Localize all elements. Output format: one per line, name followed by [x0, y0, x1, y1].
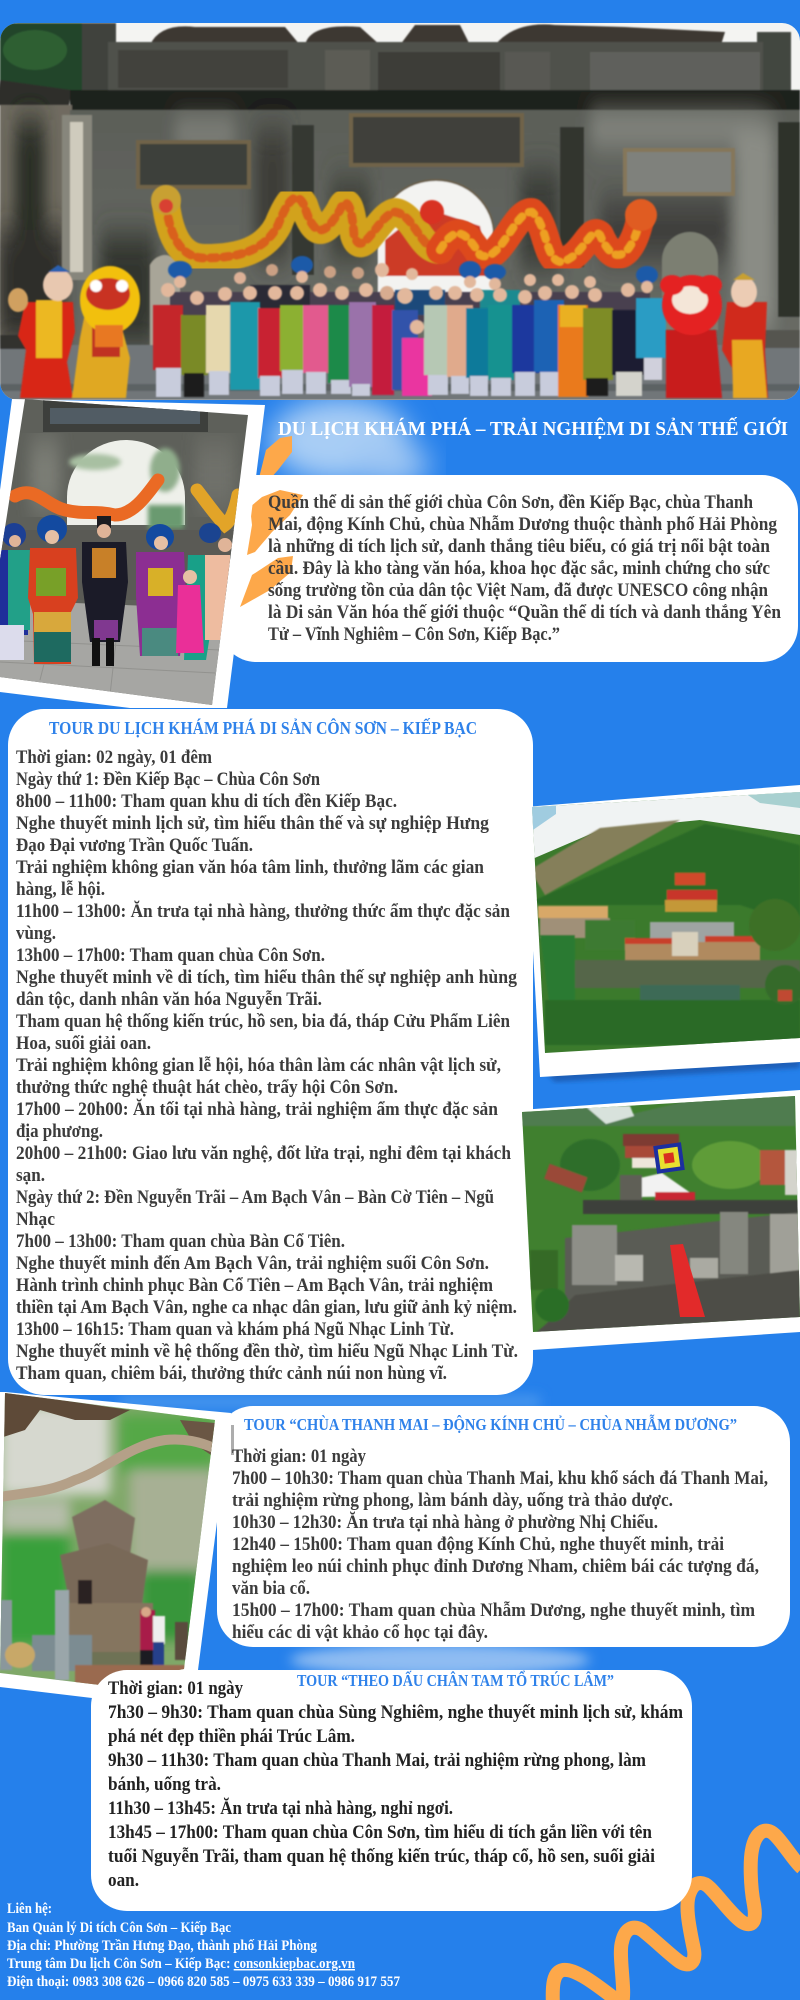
intro text: cầu. Đây là kho tàng văn hóa, khoa học đặc sắc, minh chứng cho sức — [268, 559, 770, 579]
tour 1 itinerary: Nghe thuyết minh về di tích, tìm hiểu thân thế sự nghiệp anh hùng — [16, 968, 518, 988]
intro text — [268, 493, 782, 645]
intro text: Tử – Vĩnh Nghiêm – Côn Sơn, Kiếp Bạc.” — [268, 625, 560, 645]
tour 1 itinerary: 13h00 – 17h00: Tham quan chùa Côn Sơn. — [16, 946, 325, 966]
hero dragon — [166, 198, 640, 262]
tour 2 itinerary: 15h00 – 17h00: Tham quan chùa Nhẫm Dương, nghe thuyết minh, tìm — [232, 1601, 756, 1621]
hero group of people back row — [168, 256, 658, 322]
tour 1 itinerary: sạn. — [16, 1166, 45, 1186]
tour 1 itinerary: Trải nghiệm không gian văn hóa tâm linh, thưởng lãm các gian — [16, 858, 485, 878]
contact information: Liên hệ: — [7, 1901, 52, 1917]
tour 1 itinerary: 20h00 – 21h00: Giao lưu văn nghệ, đốt lửa trại, nghỉ đêm tại khách — [16, 1144, 512, 1164]
tour 3 itinerary: 7h30 – 9h30: Tham quan chùa Sùng Nghiêm, nghe thuyết minh lịch sử, khám — [108, 1702, 683, 1723]
tour 1 itinerary: 8h00 – 11h00: Tham quan khu di tích đền Kiếp Bạc. — [16, 792, 397, 812]
tour 1 itinerary: 11h00 – 13h00: Ăn trưa tại nhà hàng, thưởng thức ẩm thực đặc sản — [16, 900, 511, 922]
contact information: Trung tâm Du lịch Côn Sơn – Kiếp Bạc: consonkiepbac.org.vn — [7, 1956, 355, 1972]
tour 3 itinerary: 9h30 – 11h30: Tham quan chùa Thanh Mai, trải nghiệm rừng phong, làm — [108, 1750, 646, 1771]
intro panel — [220, 436, 798, 662]
tour 1 itinerary: vùng. — [16, 924, 56, 944]
tour 1 itinerary: 13h00 – 16h15: Tham quan và khám phá Ngũ Nhạc Linh Từ. — [16, 1320, 454, 1340]
tour 1 itinerary: thưởng thức nghệ thuật hát chèo, trẩy hội Côn Sơn. — [16, 1078, 398, 1098]
tour 2 itinerary: văn bia cổ. — [232, 1579, 310, 1599]
tour 1 itinerary: Hành trình chinh phục Bàn Cổ Tiên – Am Bạch Vân, trải nghiệm — [16, 1276, 494, 1296]
tour 1 itinerary: Tham quan, chiêm bái, thưởng thức cảnh núi non hùng vĩ. — [16, 1364, 447, 1384]
tour 1 itinerary — [16, 748, 518, 1384]
tour 3 itinerary: oan. — [108, 1870, 139, 1891]
tour 2 itinerary: Thời gian: 01 ngày — [232, 1447, 367, 1467]
tour 3 itinerary: Thời gian: 01 ngày — [108, 1678, 243, 1699]
right photo: aerial view of gate with red carpet — [520, 1090, 800, 1350]
hero group of people front row — [153, 283, 666, 397]
tour 1 itinerary: Nghe thuyết minh đến Am Bạch Vân, trải nghiệm suối Côn Sơn. — [16, 1254, 489, 1274]
contact information: Địa chỉ: Phường Trần Hưng Đạo, thành phố Hải Phòng — [7, 1938, 318, 1954]
contact information: Ban Quản lý Di tích Côn Sơn – Kiếp Bạc — [7, 1920, 231, 1936]
hero photo: gate with dragon and group in ao dai — [0, 23, 800, 400]
tour 3 panel — [91, 1670, 692, 1911]
intro text: Quần thể di sản thế giới chùa Côn Sơn, đền Kiếp Bạc, chùa Thanh — [268, 493, 754, 513]
tour 1 itinerary: Nghe thuyết minh lịch sử, tìm hiểu thân thế và sự nghiệp Hưng — [16, 814, 490, 834]
intro text: là những di tích lịch sử, danh thắng tiêu biểu, có giá trị nổi bật toàn — [268, 537, 771, 557]
tour 1 itinerary: Trải nghiệm không gian lễ hội, hóa thân làm các nhân vật lịch sử, — [16, 1056, 501, 1076]
tour 1 itinerary: Ngày thứ 1: Đền Kiếp Bạc – Chùa Côn Sơn — [16, 770, 321, 790]
tour 2 itinerary: 10h30 – 12h30: Ăn trưa tại nhà hàng ở phường Nhị Chiểu. — [232, 1511, 658, 1533]
tour 1 itinerary: Thời gian: 02 ngày, 01 đêm — [16, 748, 213, 768]
tour 1 itinerary: địa phương. — [16, 1122, 103, 1142]
tour 1 itinerary: dân tộc, danh nhân văn hóa Nguyễn Trãi. — [16, 990, 322, 1010]
tour 2 itinerary: 12h40 – 15h00: Tham quan động Kính Chủ, nghe thuyết minh, trải — [232, 1535, 724, 1555]
intro text: Mai, động Kính Chủ, chùa Nhẫm Dương thuộc thành phố Hải Phòng — [268, 515, 778, 535]
right photo: aerial view of temple on mountain — [525, 785, 800, 1077]
tour 1 itinerary: Tham quan hệ thống kiến trúc, hồ sen, bia đá, tháp Cửu Phẩm Liên — [16, 1012, 511, 1032]
tilted photo: stone stupa among trees — [0, 1390, 231, 1700]
tilted photo: procession under gate arch — [0, 395, 265, 715]
tour 1 itinerary: Nghe thuyết minh về hệ thống đền thờ, tìm hiểu Ngũ Nhạc Linh Từ. — [16, 1342, 518, 1362]
hero wall — [0, 23, 800, 400]
tour 2 itinerary: 7h00 – 10h30: Tham quan chùa Thanh Mai, khu khổ sách đá Thanh Mai, — [232, 1469, 768, 1489]
tour 3 itinerary: 13h45 – 17h00: Tham quan chùa Côn Sơn, tìm hiểu di tích gắn liền với tên — [108, 1822, 652, 1843]
tour 3 itinerary: 11h30 – 13h45: Ăn trưa tại nhà hàng, nghỉ ngơi. — [108, 1797, 453, 1819]
hero dragon heads — [151, 185, 657, 231]
tour 2 itinerary: nghiệm leo núi chinh phục đỉnh Dương Nham, chiêm bái các tượng đá, — [232, 1557, 759, 1577]
tour 2 panel — [217, 1406, 790, 1647]
orange squiggle decoration — [553, 1831, 800, 2000]
orange brush stroke behind panel edge — [258, 436, 292, 488]
tour 1 itinerary: thiền tại Am Bạch Vân, nghe ca nhạc dân gian, lưu giữ ảnh kỷ niệm. — [16, 1298, 517, 1318]
cloud strip behind tour panels — [120, 1396, 590, 1676]
photo people — [0, 515, 232, 666]
contact information — [7, 1901, 400, 1990]
right photo frame shadow — [545, 1058, 800, 1082]
tour 1 panel — [8, 709, 533, 1395]
tour 2 itinerary — [232, 1447, 768, 1643]
tour 1 itinerary: Ngày thứ 2: Đền Nguyễn Trãi – Am Bạch Vân – Bàn Cờ Tiên – Ngũ — [16, 1188, 494, 1208]
tour 3 itinerary: phá nét đẹp thiền phái Trúc Lâm. — [108, 1726, 355, 1747]
contact information: Điện thoại: 0983 308 626 – 0966 820 585 – 0975 633 339 – 0986 917 557 — [7, 1974, 400, 1990]
tour 3 itinerary — [108, 1678, 683, 1891]
cloud texture behind heading — [270, 398, 430, 487]
tour 3 itinerary: bánh, uống trà. — [108, 1774, 221, 1795]
tour 1 itinerary: Hoa, suối giải oan. — [16, 1034, 151, 1054]
photo dragon — [15, 480, 238, 525]
tour 1 itinerary: Đạo Đại vương Trần Quốc Tuấn. — [16, 836, 253, 856]
tour 1 title: TOUR DU LỊCH KHÁM PHÁ DI SẢN CÔN SƠN – KIẾP BẠC — [49, 718, 477, 738]
intro text: sống trường tồn của dân tộc Việt Nam, đã được UNESCO công nhận — [268, 581, 769, 601]
tour 3 itinerary: tuổi Nguyễn Trãi, tham quan hệ thống kiến trúc, tháp cổ, hồ sen, suối giải — [108, 1846, 655, 1867]
tour 3 title: TOUR “THEO DẤU CHÂN TAM TỔ TRÚC LÂM” — [297, 1670, 614, 1690]
tour 2 itinerary: hiểu các di vật khảo cổ học tại đây. — [232, 1623, 488, 1643]
tour 1 itinerary: hàng, lễ hội. — [16, 880, 105, 900]
tour 2 itinerary: trải nghiệm rừng phong, làm bánh dày, uống trà thảo dược. — [232, 1491, 673, 1511]
hero mascots: lion dancers and masked figures — [8, 265, 768, 398]
orange brush strokes over panel — [240, 490, 303, 607]
intro text: là Di sản Văn hóa thế giới thuộc “Quần thể di tích và danh thắng Yên — [268, 603, 782, 623]
tour 1 itinerary: Nhạc — [16, 1210, 55, 1230]
tour 1 itinerary: 7h00 – 13h00: Tham quan chùa Bàn Cổ Tiên. — [16, 1232, 345, 1252]
tour 1 itinerary: 17h00 – 20h00: Ăn tối tại nhà hàng, trải nghiệm ẩm thực đặc sản — [16, 1098, 499, 1120]
